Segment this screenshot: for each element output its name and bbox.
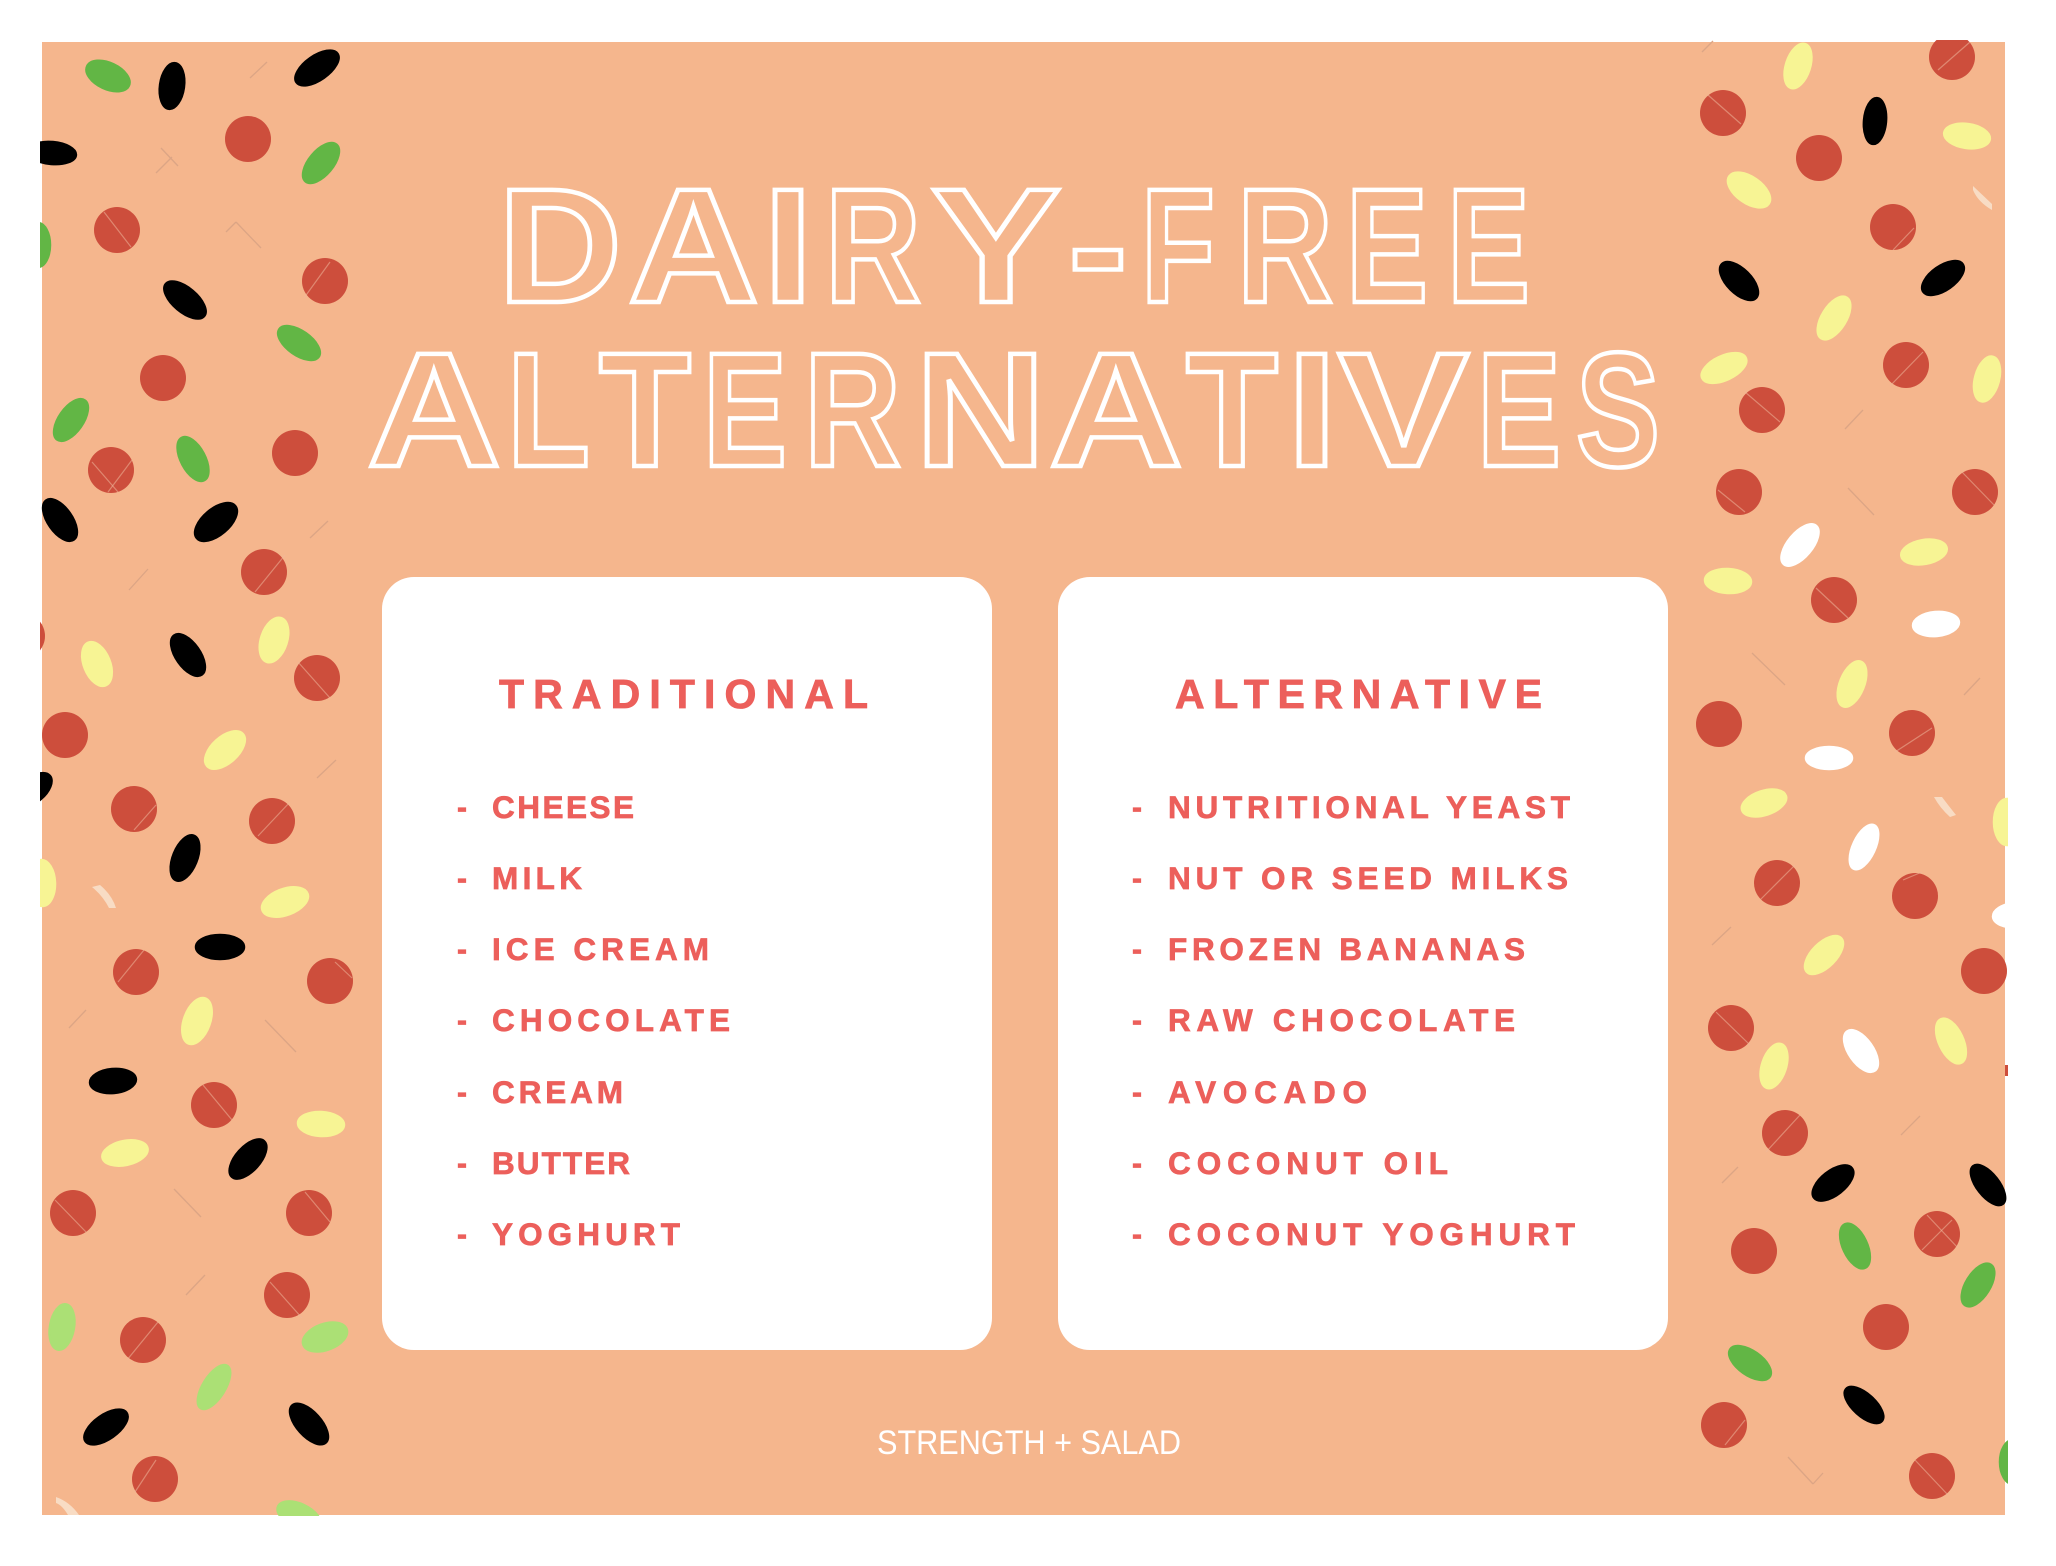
list: alternative items: NUTRITIONAL YEAST — [1168, 789, 1570, 825]
list: traditional items: CREAM — [492, 1074, 623, 1110]
list: traditional items: - — [457, 789, 467, 825]
list: alternative items: - — [1132, 931, 1142, 967]
heading: traditional: TRADITIONAL — [499, 671, 868, 717]
title: A — [628, 154, 759, 337]
title: L — [507, 318, 590, 501]
title: I — [1287, 318, 1337, 501]
confetti: left side pattern — [40, 49, 353, 1516]
title — [367, 154, 1660, 501]
confetti: right side pattern — [1696, 34, 2038, 1499]
panel: alternative — [1058, 577, 1668, 1350]
list: alternative items: FROZEN BANANAS — [1168, 931, 1525, 967]
title: S — [1576, 318, 1660, 501]
title: - — [1068, 154, 1128, 337]
list: traditional items: MILK — [492, 860, 582, 896]
list: alternative items: COCONUT OIL — [1168, 1145, 1448, 1181]
title: T — [599, 318, 691, 501]
list: traditional items: - — [457, 931, 467, 967]
heading: alternative: ALTERNATIVE — [1175, 671, 1542, 717]
list: alternative items — [1132, 789, 1575, 1252]
list: alternative items: - — [1132, 1074, 1142, 1110]
title: V — [1338, 318, 1469, 501]
title: E — [1477, 318, 1561, 501]
list: traditional items: CHEESE — [492, 789, 634, 825]
list: alternative items: RAW CHOCOLATE — [1168, 1002, 1515, 1038]
title: F — [1141, 154, 1215, 337]
list: traditional items: - — [457, 860, 467, 896]
footer credit: STRENGTH + SALAD — [877, 1424, 1181, 1462]
list: traditional items: ICE CREAM — [492, 931, 709, 967]
list: traditional items: YOGHURT — [492, 1216, 680, 1252]
list: traditional items — [457, 789, 730, 1252]
title: R — [804, 318, 901, 501]
list: traditional items: - — [457, 1002, 467, 1038]
title: R — [1237, 154, 1333, 337]
title: I — [763, 154, 813, 337]
title: E — [1447, 154, 1530, 337]
title: A — [367, 318, 501, 501]
list: alternative items: - — [1132, 1145, 1142, 1181]
panel: traditional — [382, 577, 992, 1350]
title: T — [1186, 318, 1278, 501]
title: R — [825, 154, 921, 337]
list: traditional items: - — [457, 1216, 467, 1252]
list: alternative items: - — [1132, 789, 1142, 825]
title: E — [703, 318, 787, 501]
list: traditional items: - — [457, 1145, 467, 1181]
list: traditional items: BUTTER — [492, 1145, 630, 1181]
list: alternative items: - — [1132, 860, 1142, 896]
title: Y — [931, 154, 1061, 337]
title: D — [498, 154, 622, 337]
list: alternative items: AVOCADO — [1168, 1074, 1367, 1110]
title: A — [1049, 318, 1183, 501]
title: N — [915, 318, 1046, 501]
list: alternative items: - — [1132, 1002, 1142, 1038]
list: alternative items: - — [1132, 1216, 1142, 1252]
list: traditional items: CHOCOLATE — [492, 1002, 730, 1038]
list: traditional items: - — [457, 1074, 467, 1110]
title: E — [1346, 154, 1428, 337]
list: alternative items: COCONUT YOGHURT — [1168, 1216, 1575, 1252]
list: alternative items: NUT OR SEED MILKS — [1168, 860, 1568, 896]
